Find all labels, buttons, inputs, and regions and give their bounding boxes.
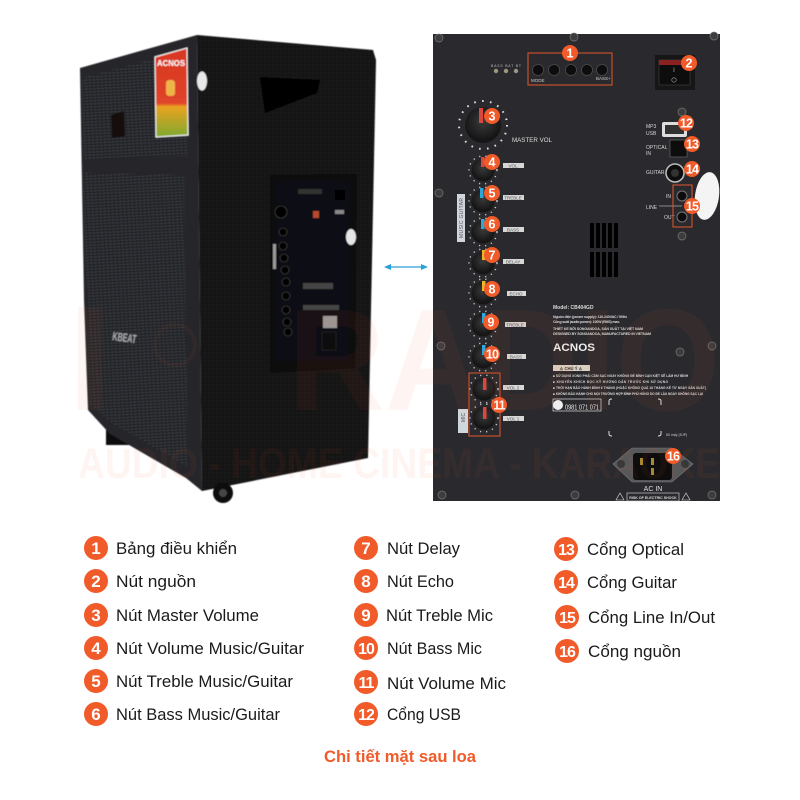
- number markers on panel: 12: [680, 116, 693, 130]
- item 2: Nút nguồn: [116, 572, 196, 591]
- line highlight: [673, 185, 692, 227]
- carry handle: [260, 77, 320, 113]
- item 9: 9: [361, 606, 371, 625]
- hotline box: 0981 071 071: [565, 404, 599, 412]
- mic tag: [458, 409, 468, 433]
- watermark: [78, 279, 720, 488]
- item 12: Cổng USB: [387, 705, 461, 724]
- line ports: IN: [666, 194, 671, 200]
- power switch: I: [673, 68, 675, 74]
- knob vol 2: [470, 375, 498, 403]
- watermark circle: [155, 325, 195, 365]
- number markers on panel: 7: [489, 248, 496, 262]
- item 3: [84, 603, 259, 627]
- item 15: 15: [559, 610, 576, 627]
- item 7: 7: [361, 539, 371, 558]
- LED labels: BASS BAT BT: [491, 64, 522, 68]
- item 2: [84, 569, 196, 593]
- lower grille: [83, 173, 188, 467]
- knob name tags: ECHO: [509, 292, 523, 296]
- white oval: [692, 171, 722, 221]
- item 11: Nút Volume Mic: [387, 674, 506, 693]
- number markers on panel: 5: [489, 186, 496, 200]
- mic tag: MIC: [461, 412, 467, 422]
- item 5: 5: [91, 672, 101, 691]
- item 6: [84, 702, 280, 726]
- knob bass: [469, 218, 497, 246]
- LEDs: [494, 69, 518, 73]
- knob name tags: BASS: [510, 354, 522, 360]
- knob treble: [469, 187, 497, 215]
- item 10: [354, 636, 482, 660]
- mode label: MODE: [531, 78, 544, 83]
- item 16: [555, 639, 681, 663]
- number markers on panel: [483, 45, 700, 464]
- model: Model: CB404GD: [553, 305, 594, 311]
- barcode frame: [609, 399, 661, 436]
- item 12: [354, 702, 461, 726]
- optical port: OPTICAL: [646, 145, 668, 151]
- item 8: 8: [361, 572, 371, 591]
- ac socket: [322, 332, 336, 350]
- legend column 1: [84, 536, 304, 726]
- item 4: 4: [91, 639, 101, 658]
- music guitar tag: [457, 194, 465, 242]
- item 13: [554, 537, 684, 561]
- upper grille: [82, 50, 187, 160]
- item 3: Nút Master Volume: [116, 606, 259, 625]
- number markers on panel: 13: [686, 138, 699, 152]
- item 2: 2: [91, 572, 101, 591]
- warnings: ■ SỬ DỤNG XONG PHẢI CẮM SẠC NGAY KHÔNG ĐỂ BÌNH CẠN KIỆT SẼ LÀM HƯ BÌNH: [553, 373, 689, 378]
- ports: [335, 210, 344, 214]
- music guitar tag: MUSIC GUITAR: [459, 198, 465, 238]
- warning tag: [553, 365, 590, 371]
- bass label: BASS+: [596, 76, 611, 81]
- item 12: 12: [358, 707, 375, 724]
- speaker side face: [197, 35, 376, 491]
- brand: ACNOS: [553, 342, 595, 354]
- number markers on panel: 4: [489, 156, 496, 170]
- item 3: 3: [91, 606, 101, 625]
- panel plate: [276, 181, 350, 361]
- ac in label: AC IN: [644, 486, 662, 493]
- item 9: Nút Treble Mic: [386, 606, 493, 625]
- item 8: Nút Echo: [387, 572, 454, 591]
- item 7: [354, 536, 460, 560]
- switch: [335, 190, 345, 200]
- number markers on panel: 11: [493, 398, 506, 412]
- number markers on panel: 6: [489, 218, 496, 232]
- vents: [590, 223, 618, 277]
- knobs: [275, 206, 292, 336]
- small knobs: [469, 156, 498, 432]
- caption: Chi tiết mặt sau loa: [324, 748, 477, 766]
- legend column 3: [554, 537, 715, 663]
- item 14: [554, 570, 677, 594]
- optical port: IN: [646, 151, 651, 157]
- model info: ■ THỜI HẠN BẢO HÀNH BÌNH 6 THÁNG (HOẶC KHÔNG QUÁ 18 THÁNG KỂ TỪ NGÀY SẢN XUẤT): [553, 385, 706, 390]
- item 1: Bảng điều khiển: [116, 539, 237, 558]
- item 10: 10: [358, 641, 375, 658]
- rear panel thumbnail: [270, 174, 357, 373]
- item 15: Cổng Line In/Out: [588, 608, 715, 627]
- master knob: [459, 101, 507, 149]
- screws: [435, 32, 718, 499]
- small sticker: [313, 211, 319, 218]
- model info: [553, 305, 706, 396]
- knob echo: [469, 279, 497, 307]
- knob name tags: VOL: [508, 164, 518, 168]
- knob bass mic: [469, 343, 497, 371]
- barcode: [323, 316, 337, 328]
- power socket: [613, 448, 693, 482]
- usb port: [646, 122, 687, 137]
- number markers on panel: 2: [686, 56, 693, 70]
- speaker front face: [80, 35, 202, 491]
- number markers on panel: 8: [489, 282, 496, 296]
- knob name tags: BASS: [507, 228, 519, 232]
- watermark tagline: AUDIO - HOME CINEMA - KARAOKE: [78, 440, 720, 488]
- knob name tags: [503, 163, 526, 422]
- model info: Công suất (audio power): 100W (RMS) max.: [553, 320, 620, 324]
- item 9: [354, 603, 493, 627]
- item 1: 1: [91, 539, 101, 558]
- sticker figure: [166, 80, 175, 96]
- model info: ■ KHUYẾN KHÍCH ĐỌC KỸ HƯỚNG DẪN TRƯỚC KHI SỬ DỤNG: [553, 379, 669, 384]
- item 10: Nút Bass Mic: [387, 639, 482, 658]
- item 13: Cổng Optical: [587, 540, 684, 559]
- legend column 2: [354, 536, 506, 726]
- model info: ■ KHÔNG BẢO HÀNH CHO MỌI TRƯỜNG HỢP BÌNH PHÙ HỎNG DO ĐỂ LÂU NGÀY KHÔNG SẠC LẠI: [553, 391, 703, 396]
- hotline box: [553, 399, 601, 412]
- number markers on panel: 14: [686, 162, 699, 176]
- shock warning: RISK OF ELECTRIC SHOCK: [629, 496, 677, 500]
- knob vol 1: [470, 404, 498, 432]
- item 4: [84, 636, 304, 660]
- guitar port: GUITAR: [646, 170, 665, 176]
- usb port: USB: [646, 131, 657, 137]
- knob delay: [469, 249, 497, 277]
- guitar port: [646, 164, 684, 182]
- display window: [111, 111, 125, 138]
- double arrow: [384, 264, 428, 270]
- line ports: OUT: [664, 215, 675, 221]
- number markers on panel: 3: [489, 110, 496, 124]
- rear panel detail: [433, 32, 722, 501]
- knob vol: [469, 156, 497, 184]
- item 6: Nút Bass Music/Guitar: [116, 705, 280, 724]
- wheel: [213, 483, 233, 503]
- model info: THIẾT KẾ BỞI SONGANDOA, SẢN XUẤT TẠI VIỆT NAM: [553, 326, 643, 331]
- shock warning: [616, 493, 690, 501]
- line ports: LINE: [646, 205, 658, 211]
- sticker brand: ACNOS: [157, 59, 186, 68]
- item 16: Cổng nguồn: [588, 642, 681, 661]
- white oval: [197, 72, 207, 90]
- master label: MASTER VOL: [512, 137, 552, 144]
- watermark name: RADIO: [288, 279, 720, 441]
- label strip: [273, 244, 276, 269]
- knob name tags: TREBLE: [504, 196, 522, 200]
- white oval: [346, 229, 356, 245]
- number markers on panel: 1: [567, 46, 574, 60]
- knob name tags: DELAY: [506, 260, 520, 264]
- number markers on panel: 15: [686, 200, 699, 214]
- power specs: Nguồn điện (power supply): 110-240VAC / 50Hz: [553, 315, 627, 319]
- knob treble mic: [469, 311, 497, 339]
- number markers on panel: 10: [486, 348, 499, 362]
- item 13: 13: [558, 542, 575, 559]
- item 11: [354, 670, 506, 694]
- item 14: 14: [558, 575, 575, 592]
- white text lines: [303, 283, 333, 289]
- power switch: [655, 55, 695, 90]
- item 7: Nút Delay: [387, 539, 460, 558]
- item 6: 6: [91, 705, 101, 724]
- item 5: [84, 669, 293, 693]
- item 4: Nút Volume Music/Guitar: [116, 639, 304, 658]
- knob name tags: TREBLE: [506, 322, 524, 328]
- speaker photo: [80, 35, 376, 503]
- optical port: [646, 140, 687, 157]
- item 16: 16: [559, 644, 576, 661]
- usb port: MP3: [646, 124, 656, 130]
- item 8: [354, 569, 454, 593]
- model info: ⚠ CHÚ Ý ⚠: [560, 366, 583, 371]
- number markers on panel: 16: [667, 450, 680, 464]
- item 1: [84, 536, 237, 560]
- mic highlight: [469, 373, 500, 436]
- line ports: [646, 191, 687, 222]
- model info: DESIGNED BY SONGANDOA, MANUFACTURED IN VIETNAM: [553, 332, 651, 336]
- knob name tags: VOL 2: [507, 386, 520, 390]
- number markers on panel: 9: [488, 316, 495, 330]
- item 15: [555, 605, 715, 629]
- panel background: [433, 34, 720, 501]
- item 11: 11: [359, 675, 375, 692]
- recess: [270, 174, 357, 373]
- item 5: Nút Treble Music/Guitar: [116, 672, 293, 691]
- brand sticker: [155, 48, 188, 137]
- item 14: Cổng Guitar: [587, 573, 677, 592]
- control panel highlight: [528, 53, 612, 85]
- knob name tags: VOL 1: [507, 416, 520, 422]
- buttons: [298, 189, 322, 194]
- front logo: KBEAT: [112, 329, 138, 346]
- legend: [84, 536, 715, 726]
- origin note: 50 mấy (SJP): [666, 433, 687, 437]
- watermark left mark: [78, 307, 102, 410]
- control buttons: [532, 64, 608, 76]
- speaker foot: [106, 425, 132, 445]
